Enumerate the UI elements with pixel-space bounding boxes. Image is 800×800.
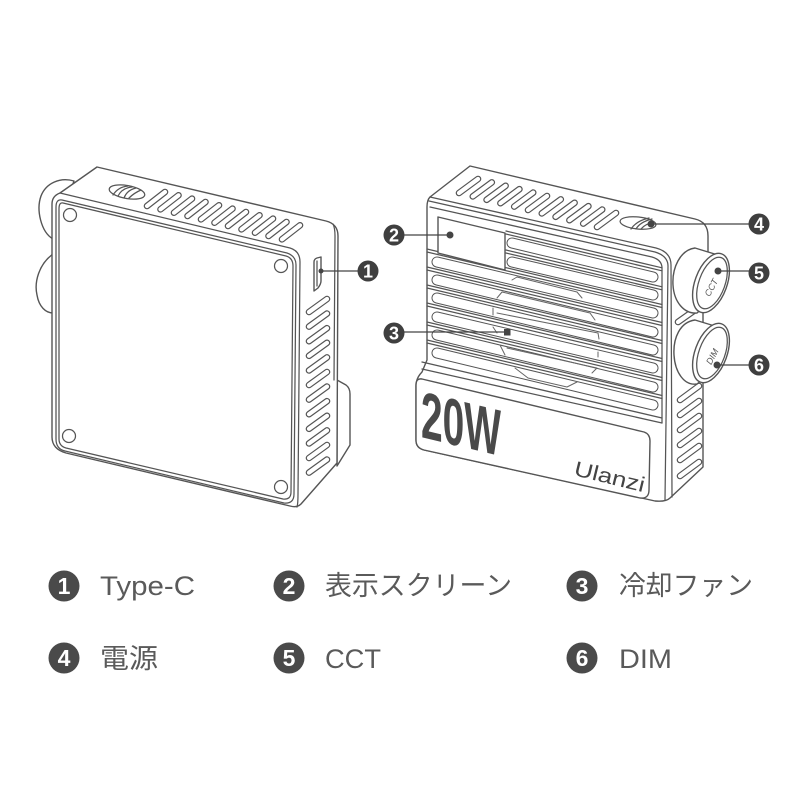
legend item 6 [566,642,672,674]
right side edge [333,224,335,380]
front frame edge [430,197,672,497]
callout 1: Type-C [318,260,378,282]
power switch [619,215,657,231]
legend item 5 [274,642,381,674]
rear plate [56,200,296,503]
callout 4: power: 4 [754,214,764,234]
legend item 3: 3 [576,573,588,599]
legend item 1 [48,570,195,602]
DIM knob [674,318,737,388]
callout 2: display screen [384,224,454,246]
legend item 5: 5 [283,645,296,671]
legend [48,570,753,674]
legend item 3 [566,570,753,602]
CCT knob: CCT [703,276,721,298]
legend item 4: 電源 [100,644,158,674]
legend item 2: 2 [283,573,295,599]
legend item 4: 4 [58,645,71,671]
callout 3: cooling fan [384,322,510,344]
DIM knob: DIM [704,347,721,366]
callout 5: CCT: 5 [754,264,764,284]
power switch [108,182,146,202]
display screen [438,217,505,270]
legend item 4 [48,642,158,674]
callout 6: DIM [714,354,770,376]
top vents [459,179,616,227]
side vents [678,310,699,476]
Ulanzi logo: Ulanzi [572,458,647,497]
right device: front view [416,166,737,501]
screws [64,208,76,222]
rear knob lower [36,254,53,313]
callout 6: DIM: 6 [754,356,764,376]
20W / Ulanzi panel [416,378,650,498]
front edge [60,193,300,507]
legend item 6: DIM [619,644,672,674]
callout 1: Type-C: 1 [363,262,373,282]
legend item 5: CCT [325,644,381,674]
20W mark: 20W [421,378,501,471]
fan vent slats [437,243,653,405]
callout 2: display screen: 2 [389,226,399,246]
callout 3: cooling fan: 3 [389,324,399,344]
grille dividers [422,231,662,423]
body outline [52,167,338,507]
rear knob upper [39,180,74,239]
side vents [309,299,327,473]
legend item 6: 6 [576,645,588,671]
Type-C port [314,257,321,291]
callout 5: CCT [714,262,770,284]
cooling fan fragments [493,277,599,387]
legend item 3: 冷却ファン [619,571,753,601]
legend item 1: Type-C [100,571,195,601]
body outline [416,166,708,501]
callout 4: power [648,214,770,234]
clamp tab [337,380,350,466]
legend item 2: 表示スクリーン [325,571,512,601]
left device: rear view [36,167,350,507]
top vents [147,192,300,239]
legend item 1: 1 [58,573,71,599]
CCT knob [673,248,737,318]
